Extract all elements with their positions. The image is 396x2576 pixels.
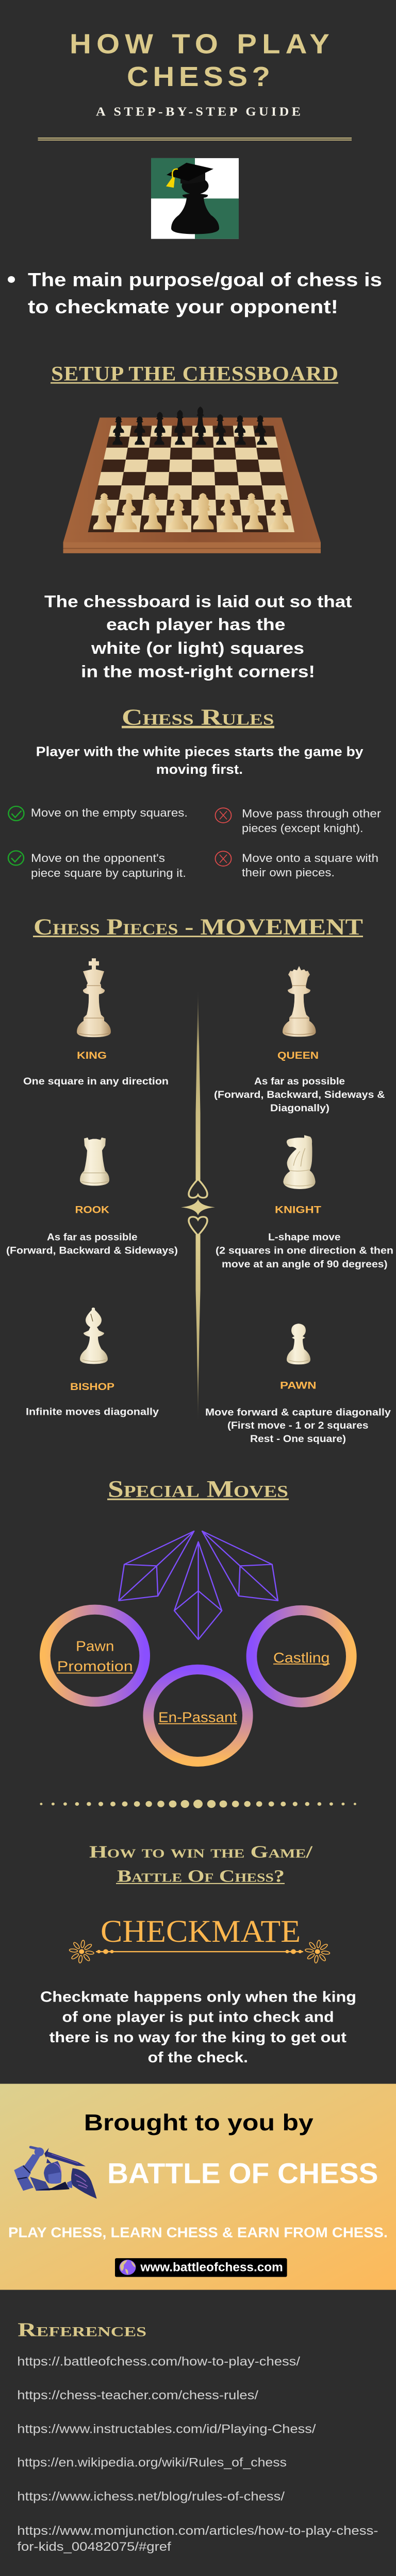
reference list	[17, 2355, 378, 2554]
piece: knight	[283, 1135, 316, 1189]
text: rook movement: As far as possible	[47, 1232, 137, 1243]
bullet statement: main goal	[8, 269, 382, 317]
text: chessboard layout: in the most-right corners!	[81, 663, 315, 681]
text: checkmate explanation: of one player is put into check and	[62, 2009, 334, 2025]
text: king movement: One square in any direction	[23, 1076, 169, 1087]
text: white moves first: Player with the white pieces starts the game by	[36, 744, 364, 759]
title: HOW TO PLAY	[70, 28, 329, 59]
circle: pawn promotion: Promotion	[57, 1658, 133, 1674]
heading: setup the chessboard: SETUP THE CHESSBOARD	[51, 362, 338, 385]
text: pawn movement: (First move - 1 or 2 squares	[227, 1420, 368, 1431]
text: bishop movement: Infinite moves diagonally	[26, 1406, 159, 1417]
text: queen movement: (Forward, Backward, Sideways &	[214, 1090, 385, 1100]
text: white moves first: moving first.	[156, 762, 243, 777]
reference list: https://en.wikipedia.org/wiki/Rules_of_chess	[17, 2455, 287, 2469]
text: rook movement	[6, 1232, 178, 1256]
reference list: https://www.momjunction.com/articles/how-to-play-chess-	[17, 2524, 378, 2538]
circle: pawn promotion: Pawn	[76, 1639, 114, 1654]
ornament under checkmate	[69, 1940, 330, 1963]
tagline: PLAY CHESS, LEARN CHESS & EARN FROM CHESS.	[8, 2225, 388, 2241]
rule: cannot pass through pieces: pieces (except knight).	[242, 822, 364, 835]
text: checkmate explanation: there is no way for the king to get out	[50, 2029, 346, 2046]
rule: capture opponent piece: piece square by capturing it.	[31, 867, 186, 879]
label: bishop: BISHOP	[70, 1382, 114, 1393]
circle: castling: Castling	[273, 1650, 329, 1666]
reference list: https://.battleofchess.com/how-to-play-chess/	[17, 2355, 300, 2368]
text: pawn movement: Move forward & capture diagonally	[205, 1407, 391, 1418]
heading: brought to you by: Brought to you by	[84, 2110, 314, 2136]
reference list: for-kids_00482075/#gref	[17, 2540, 171, 2554]
chessboard illustration	[63, 406, 321, 553]
logo: armored knight	[14, 2147, 97, 2199]
heading: checkmate: CHECKMATE	[101, 1913, 301, 1949]
text: checkmate explanation: of the check.	[148, 2049, 248, 2066]
heading: how to win: Battle Of Chess?	[117, 1866, 285, 1886]
text: pawn movement	[205, 1407, 391, 1445]
text: queen movement	[214, 1076, 385, 1114]
heading: how to win: How to win the Game/	[89, 1842, 313, 1861]
heading: references: References	[18, 2319, 146, 2341]
rule: move on empty squares: Move on the empty squares.	[31, 806, 188, 819]
text: queen movement: Diagonally)	[270, 1103, 329, 1114]
rule: capture opponent piece: Move on the opponent's	[31, 852, 165, 865]
brand name: BATTLE OF CHESS	[107, 2158, 378, 2190]
heading: special moves: Special Moves	[108, 1476, 288, 1502]
website button	[115, 2258, 287, 2277]
reference list: https://www.instructables.com/id/Playing-Chess/	[17, 2422, 316, 2436]
rule: capture opponent piece	[8, 851, 186, 879]
bullet statement: main goal: to checkmate your opponent!	[28, 296, 338, 317]
text: chessboard layout: The chessboard is laid out so that	[44, 592, 352, 611]
text: chessboard layout: each player has the	[106, 615, 286, 634]
piece: pawn	[287, 1324, 310, 1364]
rule: cannot move onto own piece: their own pieces.	[242, 866, 335, 879]
panel: brought to you by banner	[0, 2084, 396, 2290]
bullet statement: main goal: The main purpose/goal of chess is	[28, 269, 382, 291]
circle: en-passant: En-Passant	[158, 1709, 237, 1725]
text: knight movement: L-shape move	[268, 1232, 341, 1243]
text: white moves first	[36, 744, 364, 777]
circle: pawn promotion	[45, 1609, 145, 1702]
subtitle: A STEP-BY-STEP GUIDE	[96, 105, 301, 118]
rule: cannot move onto own piece	[216, 851, 378, 879]
piece: bishop	[80, 1308, 108, 1364]
piece: king	[77, 958, 111, 1037]
text: knight movement: move at an angle of 90 degrees)	[222, 1259, 388, 1270]
dotted divider	[40, 1800, 356, 1808]
text: knight movement	[216, 1232, 393, 1270]
label: queen: QUEEN	[277, 1050, 319, 1061]
rule: cannot move onto own piece: Move onto a square with	[242, 852, 378, 865]
double rule under title	[38, 138, 352, 141]
circle: en-passant	[148, 1669, 248, 1761]
reference list: https://chess-teacher.com/chess-rules/	[17, 2388, 258, 2402]
text: queen movement: As far as possible	[254, 1076, 345, 1087]
text: checkmate explanation: Checkmate happens only when the king	[40, 1989, 356, 2005]
text: chessboard layout: white (or light) squares	[91, 639, 304, 658]
label: pawn: PAWN	[280, 1380, 317, 1391]
rule: cannot pass through pieces: Move pass through other	[242, 807, 381, 820]
rule: cannot pass through pieces	[216, 807, 381, 835]
piece: rook	[80, 1138, 109, 1186]
piece: queen	[283, 966, 316, 1037]
text: checkmate explanation	[40, 1989, 356, 2066]
text: chessboard layout	[44, 592, 352, 681]
label: rook: ROOK	[75, 1205, 109, 1215]
heading: chess pieces movement: Chess Pieces - MOVEMENT	[34, 914, 363, 940]
label: knight: KNIGHT	[275, 1205, 322, 1215]
circle: castling	[252, 1610, 351, 1702]
icon: purple geometric fan	[119, 1531, 278, 1639]
label: king: KING	[77, 1050, 107, 1061]
icon: pawn with graduation cap	[151, 158, 239, 239]
text: pawn movement: Rest - One square)	[250, 1434, 346, 1445]
text: knight movement: (2 squares in one direction & then	[216, 1245, 393, 1256]
title: CHESS?	[127, 61, 270, 92]
heading: chess rules: Chess Rules	[122, 705, 274, 730]
reference list: https://www.ichess.net/blog/rules-of-chess/	[17, 2489, 285, 2503]
text: rook movement: (Forward, Backward & Sideways)	[6, 1245, 178, 1256]
heading: how to win	[89, 1842, 313, 1886]
title	[70, 28, 329, 92]
website button: www.battleofchess.com	[140, 2261, 283, 2274]
divider ornament	[181, 990, 215, 1421]
